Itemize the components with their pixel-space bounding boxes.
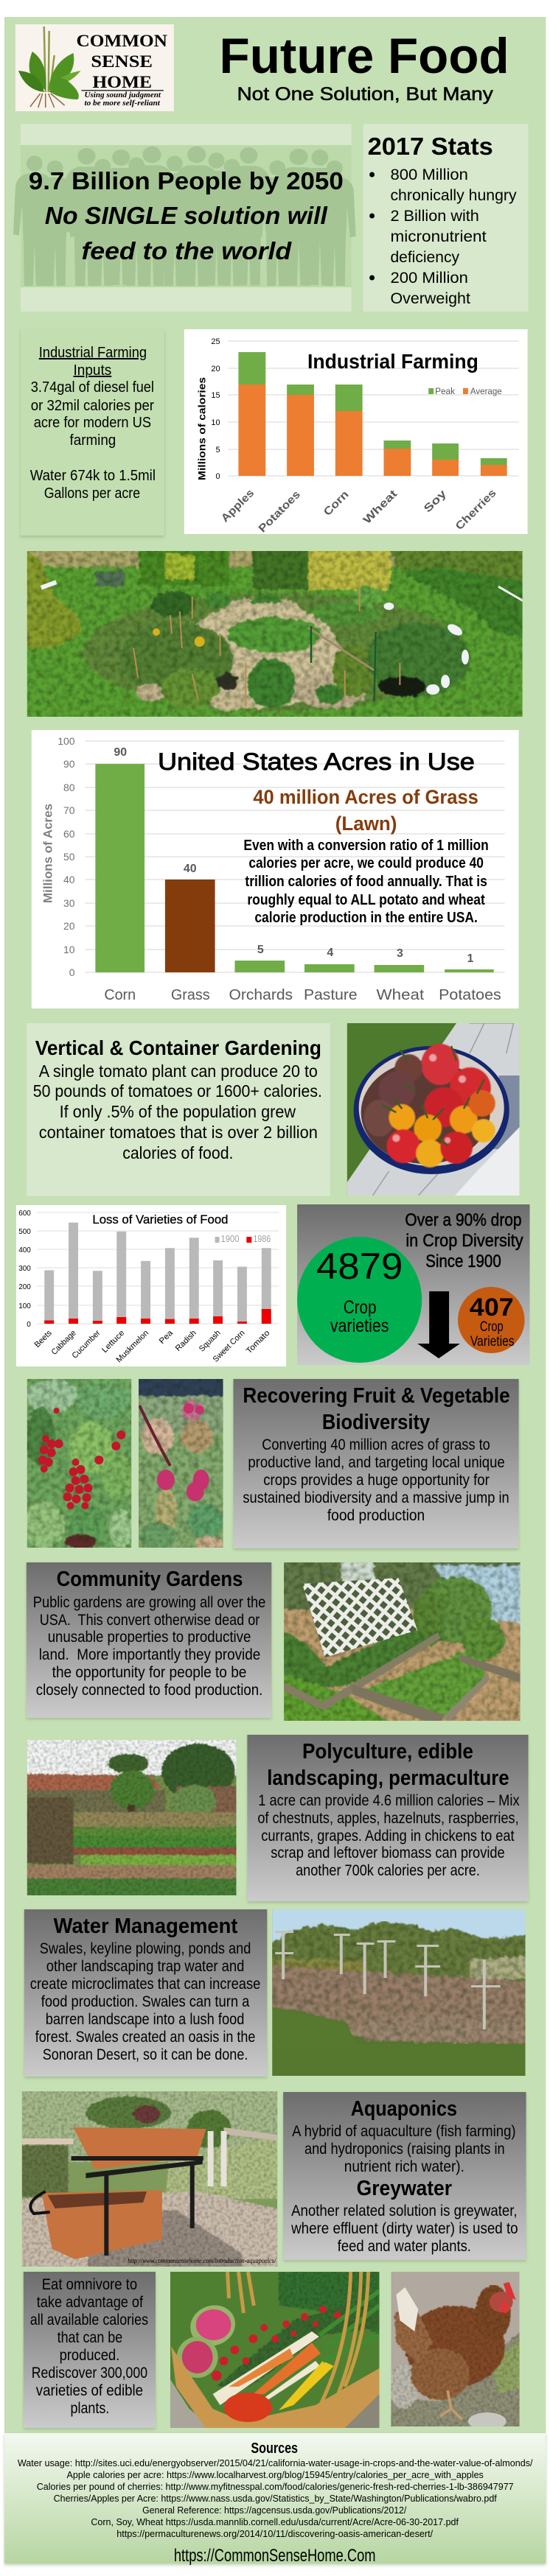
callout: grass: calorie production in the entire USA. [254, 910, 478, 926]
panel: vertical and container gardening: A single tomato plant can produce 20 to [39, 1061, 318, 1081]
panel: water management: other landscaping trap water and [46, 1958, 244, 1975]
green circle: 4879 varieties [297, 1237, 422, 1363]
value labels [114, 746, 473, 965]
panel: sources: Apple calories per acre: https://www.localharvest.org/blog/15945/entry/calories_per_acre_with_apples [67, 2469, 484, 2480]
y axis ticks [211, 337, 220, 481]
panel: eat omnivore: produced. [60, 2347, 119, 2364]
orange circle: 407 varieties: Crop [480, 1319, 504, 1335]
panel: industrial farming inputs: 3.74gal of diesel fuel [31, 379, 154, 396]
panel: water management: forest. Swales created an oasis in the [35, 2029, 255, 2046]
panel: industrial farming inputs: or 32mil calories per [31, 398, 154, 414]
bars 1986 [44, 1309, 271, 1324]
y axis ticks: 200 [18, 1283, 31, 1291]
panel: sources: Calories per pound of cherries: http://www.myfitnesspal.com/food/calories/generic-fresh-red-cherries-1-lb-386947977 [37, 2481, 514, 2492]
y axis ticks: 50 [63, 851, 75, 863]
panel: water management: barren landscape into a lush food [46, 2011, 244, 2028]
panel: recovering biodiversity: food production [327, 1507, 425, 1524]
y axis ticks: 0 [215, 472, 220, 481]
legend: Peak [435, 386, 455, 396]
category labels: Pea [158, 1328, 175, 1346]
panel: industrial farming inputs: Gallons per acre [44, 485, 140, 502]
panel: population [13, 124, 356, 312]
panel: polyculture: of chestnuts, apples, hazelnuts, raspberries, [257, 1810, 519, 1827]
photo: swales [268, 1909, 535, 2076]
panel: 2017 stats [363, 124, 529, 312]
bars [95, 764, 494, 972]
photo: hen [391, 2272, 520, 2426]
y axis ticks: 300 [18, 1265, 31, 1273]
panel: 2017 stats: 2017 Stats [368, 133, 493, 160]
category labels: Sweet Corn [212, 1329, 247, 1364]
panel: recovering biodiversity [233, 1379, 519, 1548]
panel: community gardens: unusable properties to productive [48, 1629, 251, 1646]
category labels: Tomato [245, 1329, 271, 1355]
panel: aquaponics and greywater: nutrient rich water). [344, 2158, 464, 2175]
panel: sources: Water usage: http://sites.uci.edu/energyobserver/2015/04/21/california-water-usage-in-crops-and-the-water-value-of-almonds/ [18, 2457, 533, 2468]
chart: united states acres in use [32, 730, 519, 1008]
category labels: Beets [33, 1328, 54, 1350]
category labels: Pasture [304, 987, 358, 1003]
value labels: 90 [114, 746, 127, 759]
y axis ticks: 60 [63, 828, 75, 840]
category labels: Corn [321, 488, 352, 519]
legend [215, 1233, 271, 1244]
panel: eat omnivore: that can be [58, 2329, 122, 2346]
category labels: Muskmelon [115, 1329, 150, 1364]
photo: trellis raised beds [279, 1558, 526, 1726]
panel: eat omnivore: all available calories [30, 2312, 148, 2328]
category labels [104, 987, 501, 1003]
green circle: 4879 varieties: varieties [330, 1316, 389, 1336]
panel: sources: https://permaculturenews.org/2014/10/11/discovering-oasis-american-desert/ [116, 2528, 434, 2539]
panel: population: 9.7 Billion People by 2050 [29, 167, 344, 194]
logo: Common Sense Home: Using sound judgment [84, 91, 161, 99]
y axis ticks: 500 [18, 1228, 31, 1236]
photo: circular garden [22, 545, 529, 722]
y axis ticks: 20 [63, 920, 75, 932]
y axis ticks [58, 735, 75, 978]
category labels: Lettuce [100, 1329, 126, 1355]
chart title: United States Acres in Use [158, 748, 475, 775]
value labels: 4 [327, 947, 333, 959]
callout: grass: (Lawn) [335, 813, 397, 835]
panel: sources: Cherries/Apples per Acre: https://www.nass.usda.gov/Statistics_by_State/Washington/Publications/wabro.pdf [54, 2493, 497, 2504]
panel: water management: create microclimates that can increase [30, 1976, 260, 1993]
orange circle: 407 varieties: Varieties [470, 1334, 515, 1350]
bars [238, 352, 507, 476]
callout: grass: Even with a conversion ratio of 1 million [243, 838, 489, 854]
category labels: Radish [174, 1329, 198, 1353]
panel: industrial farming inputs: Inputs [74, 362, 111, 379]
y axis ticks: 100 [58, 735, 75, 747]
category labels: Potatoes [256, 488, 303, 535]
chart: industrial farming [184, 329, 528, 535]
panel: polyculture: 1 acre can provide 4.6 million calories – Mix [258, 1792, 520, 1809]
panel: 2017 stats: 200 Million [390, 270, 468, 287]
legend: Average [470, 386, 502, 396]
panel: community gardens [27, 1562, 271, 1718]
panel: polyculture: currants, grapes. Adding in chickens to eat [261, 1828, 515, 1845]
value labels: 40 [184, 863, 197, 875]
panel: industrial farming inputs: farming [70, 432, 116, 449]
panel: aquaponics and greywater: Aquaponics [351, 2097, 457, 2121]
logo: Common Sense Home: SENSE [91, 52, 153, 71]
y axis ticks: 20 [211, 365, 220, 373]
panel: water management: Swales, keyline plowing, ponds and [40, 1940, 251, 1957]
callout: grass [243, 786, 489, 926]
panel: aquaponics and greywater: A hybrid of aquaculture (fish farming) [292, 2123, 516, 2140]
panel: community gardens: Community Gardens [57, 1568, 243, 1591]
icon: plantain plant [18, 27, 80, 108]
panel: sources [4, 2433, 546, 2566]
panel: aquaponics and greywater: Another related solution is greywater, [291, 2203, 518, 2219]
orange circle: 407 varieties: 407 [470, 1294, 514, 1322]
panel: sources: Sources [251, 2440, 298, 2457]
panel: aquaponics and greywater: Greywater [357, 2177, 452, 2200]
panel: recovering biodiversity: crops provides a huge opportunity for [263, 1472, 490, 1489]
website url: https://CommonSenseHome.Com [174, 2546, 376, 2566]
y axis ticks: 30 [63, 897, 75, 909]
logo: Common Sense Home: to be more self-reliant [84, 99, 161, 108]
logo: Common Sense Home: COMMON [77, 32, 167, 50]
legend: 1900 [221, 1233, 239, 1244]
category labels: Cherries [453, 487, 499, 533]
category labels: Apples [219, 487, 257, 524]
y axis title: Millions of calories [197, 377, 208, 480]
panel: water management: Water Management [54, 1915, 238, 1938]
callout: grass: calories per acre, we could produce 40 [248, 855, 484, 871]
legend: 1986 [253, 1233, 271, 1244]
panel: sources: General Reference: https://agcensus.usda.gov/Publications/2012/ [142, 2505, 407, 2516]
panel: industrial farming inputs [21, 329, 164, 536]
category labels: Wheat [361, 488, 400, 527]
y axis ticks: 10 [63, 944, 75, 955]
panel: polyculture [247, 1735, 529, 1901]
panel: recovering biodiversity: sustained biodiversity and a massive jump in [243, 1489, 509, 1506]
logo: Common Sense Home [15, 24, 174, 111]
panel: vertical and container gardening [27, 1023, 330, 1196]
y axis ticks: 600 [18, 1210, 31, 1218]
category labels: Wheat [377, 987, 425, 1003]
panel: water management: food production. Swales can turn a [41, 1993, 250, 2010]
panel: aquaponics and greywater: and hydroponics (raising plants in [304, 2141, 505, 2158]
panel: vertical and container gardening: 50 pounds of tomatoes or 1600+ calories. [33, 1081, 322, 1101]
panel: eat omnivore [24, 2272, 156, 2428]
y axis ticks: 100 [18, 1302, 31, 1310]
category labels: Cucumber [71, 1328, 102, 1361]
y axis ticks: 0 [69, 966, 75, 978]
chart title: Industrial Farming [307, 350, 478, 373]
photo: polyculture garden [27, 1740, 236, 1895]
panel: aquaponics and greywater [283, 2092, 526, 2260]
panel: crop diversity drop: Over a 90% drop [405, 1210, 522, 1230]
panel: polyculture: scrap and leftover biomass can provide [271, 1845, 505, 1861]
panel: community gardens: land. More importantly they provide [39, 1646, 260, 1663]
legend [428, 386, 502, 396]
y axis title: Millions of Acres [41, 804, 55, 903]
panel: industrial farming inputs: Water 674k to 1.5mil [30, 468, 156, 484]
panel: 2017 stats: deficiency [390, 249, 460, 266]
panel: water management: Sonoran Desert, so it can be done. [43, 2046, 248, 2063]
panel: water management [24, 1909, 267, 2077]
panel: eat omnivore: Rediscover 300,000 [32, 2365, 147, 2382]
panel: eat omnivore: plants. [71, 2400, 109, 2417]
y axis ticks: 25 [211, 337, 220, 346]
panel: aquaponics and greywater: feed and water plants. [338, 2238, 471, 2255]
chart title: Loss of Varieties of Food [92, 1212, 229, 1226]
y axis ticks: 400 [18, 1246, 31, 1254]
photo: red currants [27, 1379, 131, 1548]
panel: 2017 stats: 2 Billion with [390, 208, 479, 225]
y axis ticks: 40 [63, 874, 75, 885]
y axis ticks: 0 [27, 1321, 31, 1329]
y axis ticks [18, 1210, 31, 1329]
panel: industrial farming inputs: acre for modern US [34, 415, 151, 431]
y axis ticks: 5 [215, 446, 220, 455]
photo: aquaponics [18, 2088, 282, 2273]
y axis ticks: 80 [63, 782, 75, 793]
lattice trellis [302, 1578, 417, 1657]
panel: community gardens: the opportunity for people to be [52, 1664, 246, 1681]
logo: Common Sense Home: HOME [92, 73, 152, 91]
orange circle: 407 varieties [458, 1287, 525, 1353]
panel: community gardens: USA. This convert otherwise dead or [40, 1612, 260, 1629]
icon: crowd silhouettes [13, 147, 356, 286]
arrow down [417, 1291, 460, 1358]
panel: crop diversity drop [297, 1204, 530, 1365]
bars 1900 [44, 1223, 271, 1324]
panel: vertical and container gardening: container tomatoes that is over 2 billion [39, 1123, 318, 1142]
panel: eat omnivore: take advantage of [37, 2294, 143, 2311]
panel: eat omnivore: Eat omnivore to [42, 2276, 137, 2293]
category labels: Orchards [229, 987, 293, 1003]
category labels: Potatoes [439, 987, 501, 1003]
photo credit: http://www.commonsensehome.com/introduction-aquaponics/ [128, 2258, 276, 2265]
value labels: 3 [397, 947, 403, 960]
y axis ticks: 15 [211, 391, 220, 400]
panel: community gardens: Public gardens are growing all over the [33, 1594, 265, 1611]
green circle: 4879 varieties: 4879 [316, 1246, 403, 1287]
value labels: 1 [467, 952, 473, 965]
callout: grass: roughly equal to ALL potato and wheat [247, 892, 485, 908]
title: Future Food [220, 29, 509, 84]
panel: vertical and container gardening: If only .5% of the population grew [60, 1102, 296, 1121]
value labels: 5 [257, 944, 264, 956]
y axis ticks: 70 [63, 804, 75, 816]
green circle: 4879 varieties: Crop [344, 1297, 377, 1318]
panel: crop diversity drop: Since 1900 [425, 1252, 501, 1271]
photo: raspberries [139, 1379, 223, 1548]
category labels: Grass [171, 987, 210, 1003]
category labels: Soy [422, 487, 450, 515]
panel: recovering biodiversity: Recovering Fruit & Vegetable [243, 1384, 510, 1408]
panel: polyculture: another 700k calories per acre. [296, 1862, 480, 1879]
panel: vertical and container gardening: Vertical & Container Gardening [35, 1036, 321, 1059]
photo: vegetable basket [170, 2272, 380, 2428]
panel: polyculture: landscaping, permaculture [267, 1766, 509, 1790]
panel: sources: Corn, Soy, Wheat https://usda.mannlib.cornell.edu/usda/current/Acre/Acre-06-30-2017.pdf [91, 2516, 459, 2527]
panel: population: No SINGLE solution will [45, 202, 328, 229]
panel: 2017 stats: chronically hungry [390, 187, 517, 204]
subtitle: Not One Solution, But Many [237, 84, 493, 105]
category labels: Corn [104, 987, 136, 1003]
panel: recovering biodiversity: Biodiversity [322, 1411, 430, 1434]
panel: 2017 stats: Overweight [390, 290, 470, 307]
y axis ticks: 90 [63, 758, 75, 770]
panel: aquaponics and greywater: where effluent (dirty water) is used to [290, 2220, 518, 2237]
panel: 2017 stats: micronutrient [390, 228, 487, 245]
photo: bowl of tomatoes [347, 1023, 520, 1196]
panel: vertical and container gardening: calories of food. [122, 1143, 233, 1162]
y axis ticks: 10 [211, 418, 220, 427]
panel: eat omnivore: varieties of edible [36, 2382, 143, 2399]
panel: recovering biodiversity: Converting 40 million acres of grass to [262, 1436, 490, 1453]
callout: grass: trillion calories of food annually. That is [245, 874, 487, 890]
panel: polyculture: Polyculture, edible [302, 1740, 473, 1763]
category labels: Cabbage [50, 1329, 78, 1357]
chart: loss of varieties of food [16, 1205, 286, 1366]
callout: grass: 40 million Acres of Grass [253, 786, 478, 808]
category labels: Squash [198, 1329, 223, 1354]
panel: industrial farming inputs: Industrial Farming [39, 345, 147, 361]
panel: crop diversity drop: in Crop Diversity [405, 1231, 523, 1251]
category labels [219, 487, 499, 535]
category labels [33, 1328, 271, 1364]
panel: recovering biodiversity: productive land, and targeting local unique [248, 1454, 505, 1471]
panel: 2017 stats: 800 Million [390, 166, 468, 183]
panel: population: feed to the world [81, 237, 292, 264]
panel: community gardens: closely connected to food production. [36, 1682, 262, 1699]
